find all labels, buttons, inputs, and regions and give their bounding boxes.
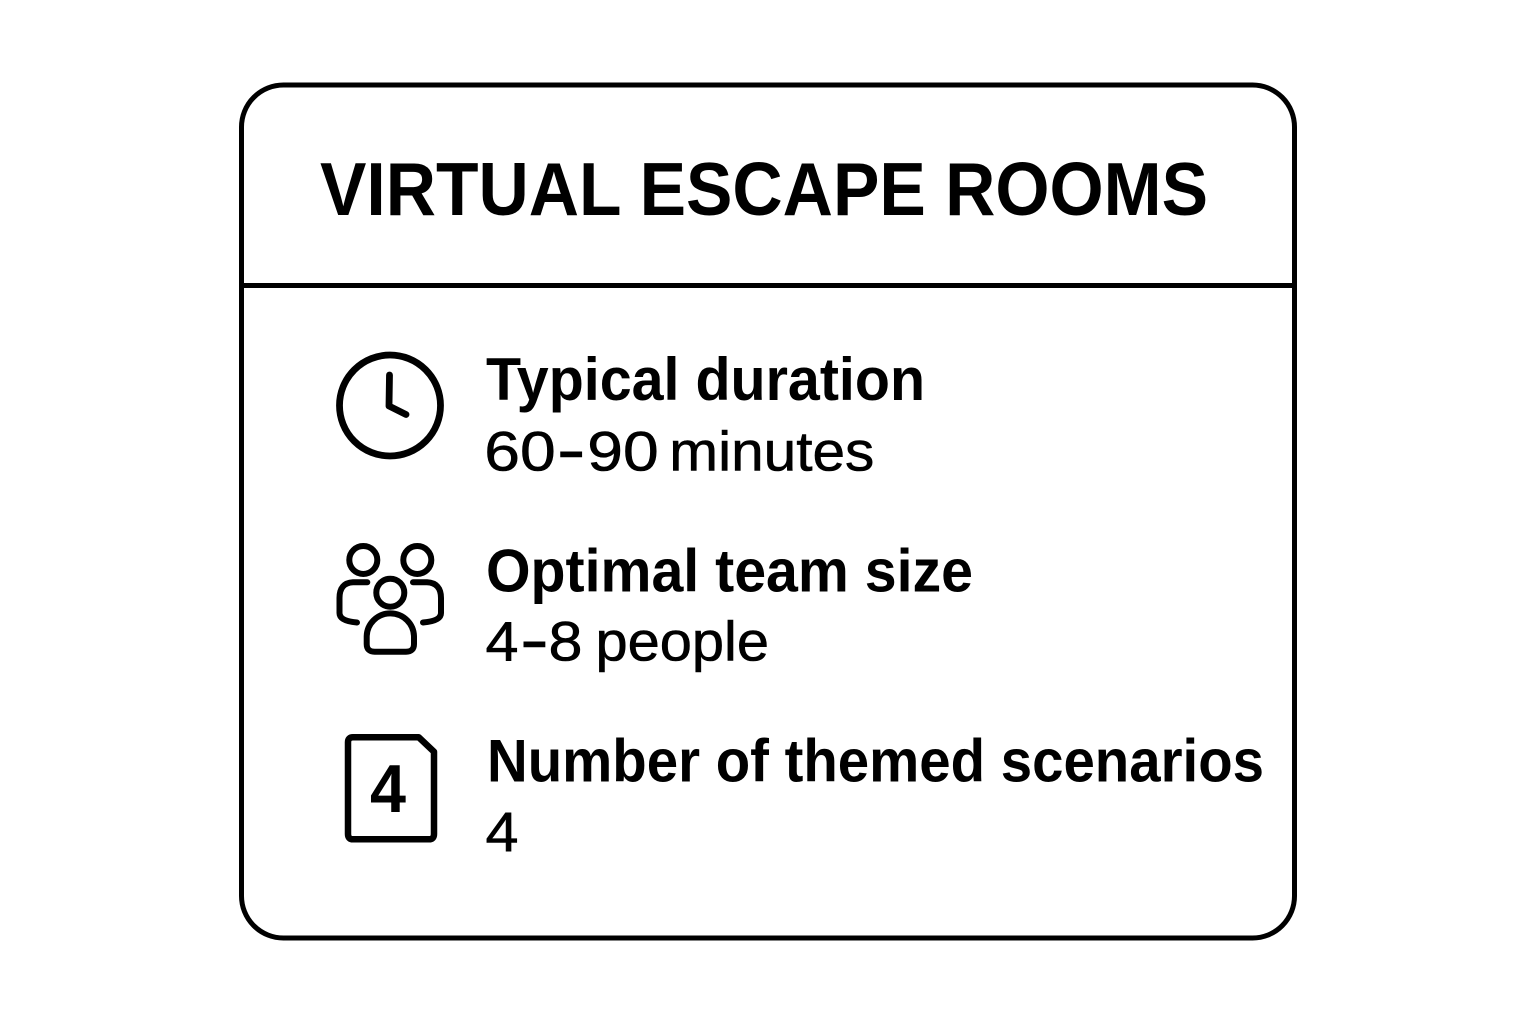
document number: 4 [370, 751, 406, 827]
value: duration: 60 [484, 420, 556, 482]
icon: clock [340, 355, 440, 456]
label: number of themed scenarios: Number of themed scenarios [487, 728, 1264, 794]
value: team size: – [525, 623, 544, 660]
value: scenario count: 4 [486, 800, 518, 863]
value: duration: 90 [587, 420, 659, 482]
title: VIRTUAL ESCAPE ROOMS [320, 147, 1208, 231]
value: team size: people [596, 610, 769, 672]
row: themed scenarios [348, 728, 1264, 863]
icon: people group [340, 546, 441, 652]
value: team size: 4 [486, 610, 518, 672]
card outline [242, 85, 1294, 938]
value: duration: minutes [669, 420, 874, 482]
value: duration: – [562, 433, 581, 470]
label: typical duration: Typical duration [486, 346, 925, 413]
panel: info card [241, 85, 1295, 938]
row: team size [340, 538, 973, 672]
row: typical duration [340, 346, 925, 482]
document outline [348, 737, 434, 839]
icon: numbered document [348, 737, 434, 839]
value: team size: 8 [548, 610, 582, 672]
label: optimal team size: Optimal team size [486, 538, 973, 604]
